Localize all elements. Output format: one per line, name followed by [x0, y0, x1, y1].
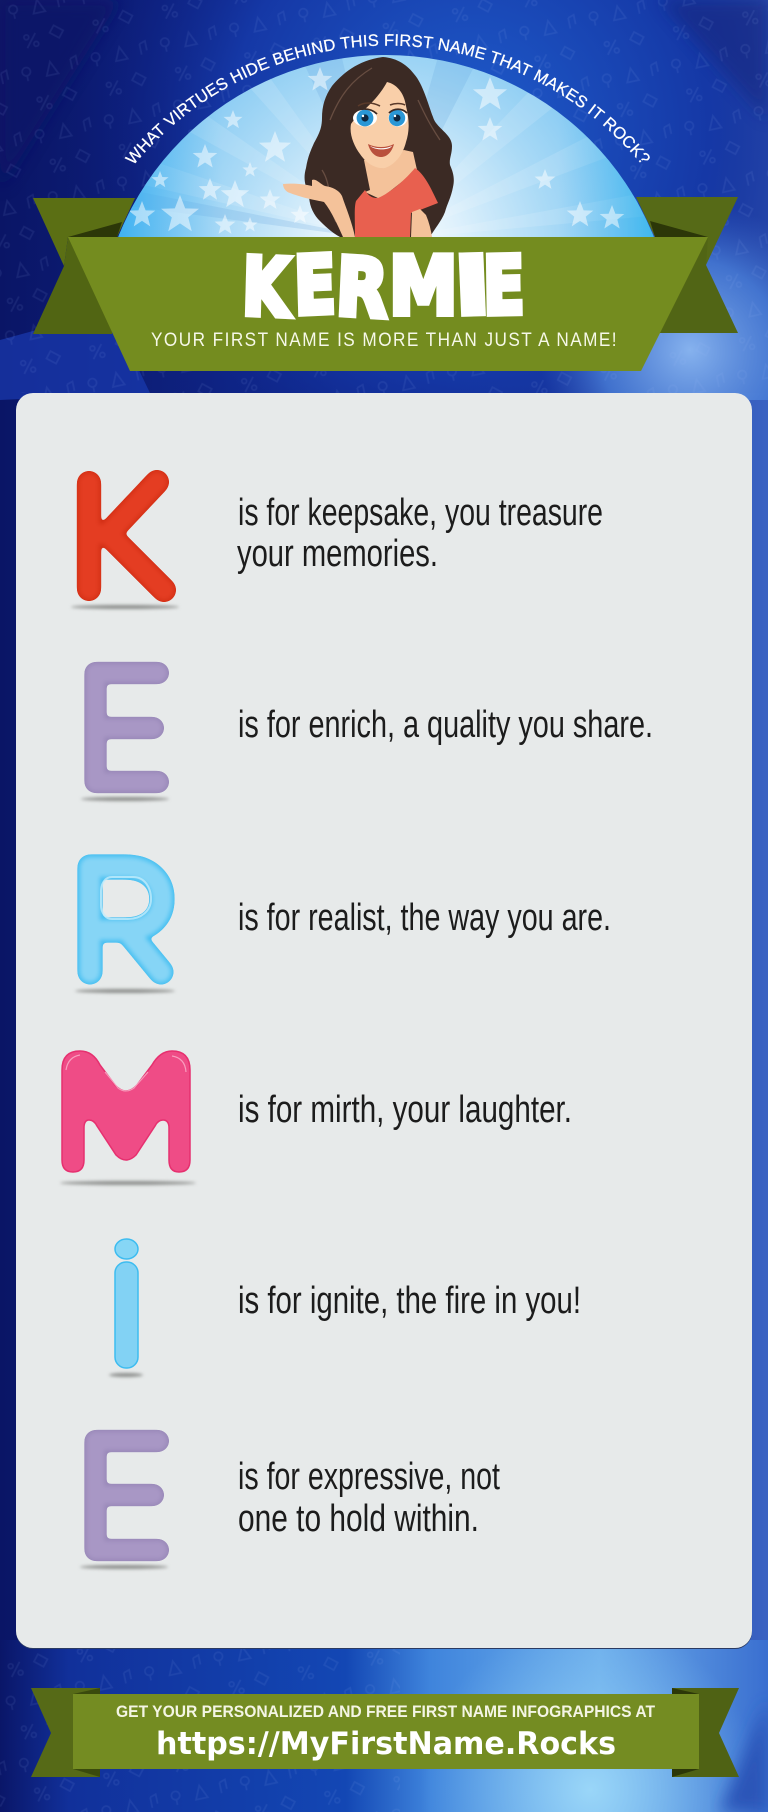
footer ribbon [31, 1688, 739, 1777]
left eye [353, 109, 377, 126]
footer left tail [31, 1688, 100, 1777]
name heading: E [482, 239, 525, 333]
ribbon: left tail [33, 198, 135, 334]
letter E second [80, 1441, 168, 1569]
letter R [75, 867, 175, 993]
right arm [411, 209, 432, 237]
row K [71, 482, 603, 609]
face [351, 82, 409, 168]
footer main panel [73, 1694, 699, 1769]
footer url: https://MyFirstName.Rocks [156, 1726, 616, 1762]
row E2 [80, 1441, 500, 1569]
subtitle: YOUR FIRST NAME IS MORE THAN JUST A NAME! [151, 330, 618, 351]
hair [305, 57, 454, 237]
decorative dome [118, 55, 654, 237]
neck and chest [364, 150, 417, 199]
name heading: I [454, 238, 491, 333]
text M: is for mirth, your laughter. [238, 1089, 572, 1131]
footer call to action: GET YOUR PERSONALIZED AND FREE FIRST NAME INFOGRAPHICS AT [116, 1702, 656, 1721]
letter M [60, 1051, 196, 1185]
mouth [368, 144, 394, 157]
row M [60, 1051, 572, 1185]
name heading: M [389, 240, 458, 333]
letter i [109, 1239, 143, 1377]
text K: your memories. [237, 533, 438, 575]
name heading [241, 238, 525, 337]
right eye [388, 109, 408, 126]
text K [237, 492, 603, 575]
curved tagline: WHAT VIRTUES HIDE BEHIND THIS FIRST NAME THAT MAKES IT ROCK? [124, 34, 650, 164]
letter K [71, 482, 179, 609]
row i [109, 1239, 581, 1377]
row R [75, 867, 611, 993]
name heading: R [334, 240, 390, 337]
ribbon: main panel [68, 237, 708, 371]
text K: is for keepsake, you treasure [238, 492, 603, 534]
text E second [238, 1456, 500, 1540]
text i: is for ignite, the fire in you! [238, 1280, 581, 1322]
eyebrows [358, 103, 405, 106]
ribbon: right tail [636, 197, 738, 333]
text E second: is for expressive, not [238, 1456, 500, 1498]
name heading: K [241, 240, 293, 335]
letter E [81, 673, 169, 801]
row E [81, 673, 653, 801]
text R: is for realist, the way you are. [238, 897, 611, 939]
shirt [355, 168, 438, 237]
footer right tail [672, 1688, 739, 1777]
name heading: E [293, 238, 337, 333]
panel: letters card [16, 393, 752, 1649]
left arm and hand [283, 180, 355, 237]
ribbon folds [68, 221, 708, 237]
text E second: one to hold within. [238, 1498, 479, 1540]
illustration: woman presenting [283, 57, 454, 237]
